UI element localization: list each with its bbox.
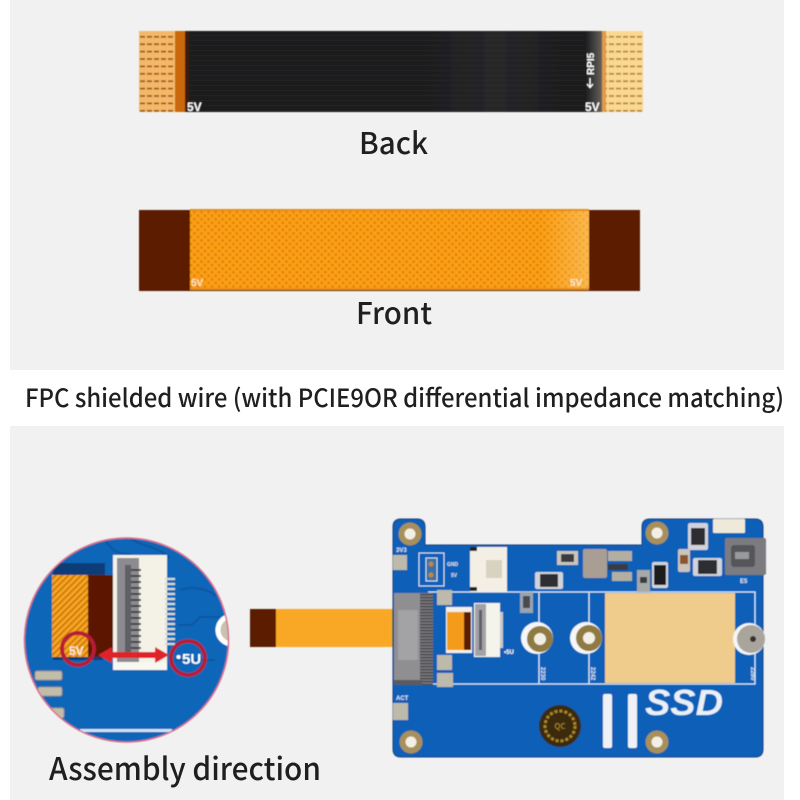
caption: FPC shielded wire (with PCIE9OR differential impedance matching) [25, 379, 784, 415]
silkscreen text [396, 548, 755, 702]
front of FPC cable: 5V [191, 278, 204, 289]
panel: assembly background [10, 426, 784, 800]
small components [35, 671, 64, 718]
fan header [470, 547, 507, 592]
SSD label: SSD [645, 682, 723, 723]
silkscreen text: 2242 [589, 667, 595, 681]
red marker circles [62, 633, 94, 665]
silkscreen text: E5 [740, 579, 748, 585]
onboard flex [446, 607, 472, 653]
front of FPC cable [139, 209, 640, 291]
silkscreen bars [603, 694, 637, 748]
silkscreen text: 3V3 [396, 548, 407, 554]
connector body [113, 555, 167, 670]
white arc [214, 614, 228, 647]
back of FPC cable [139, 31, 643, 114]
mounting holes [402, 524, 666, 750]
silkscreen text: ACT [396, 696, 409, 702]
QC sticker [539, 705, 581, 747]
double arrow [98, 647, 169, 663]
USB-C connector [725, 538, 766, 575]
dark trace area [53, 563, 105, 575]
back of FPC cable: 5V [187, 100, 202, 114]
small white JST connector [713, 519, 745, 533]
board 5V label: •5U [504, 650, 514, 656]
surface mount components [393, 523, 722, 720]
M.2 standoff holes [521, 622, 765, 655]
thermal pad [605, 593, 735, 683]
adapter board [393, 519, 766, 757]
flex cable leading to board [250, 609, 394, 647]
fan polarity icon [419, 553, 444, 586]
inset: magnified connector [24, 538, 246, 742]
silkscreen text: 5V [451, 573, 458, 579]
5V on flex: 5V [69, 644, 84, 658]
5V on board: 5U [182, 651, 201, 668]
flex tail with pattern [52, 575, 89, 657]
panel: cable views background [10, 0, 784, 370]
silkscreen text: 2280 [749, 667, 755, 681]
label: Assembly direction: Assembly direction [49, 744, 321, 789]
silkscreen text: 2230 [539, 667, 545, 681]
QC sticker: QC [554, 721, 566, 732]
back of FPC cable: RPI5 [586, 52, 597, 75]
silkscreen line [80, 729, 172, 732]
silkscreen outline [428, 592, 755, 684]
label: Front: Front [356, 289, 432, 333]
label: Back: Back [359, 119, 428, 163]
onboard FPC connector [474, 603, 503, 657]
M.2 connector [394, 593, 433, 685]
back of FPC cable: 5V [585, 100, 600, 114]
front of FPC cable: 5V [570, 278, 583, 289]
silkscreen text: GND [447, 562, 458, 568]
